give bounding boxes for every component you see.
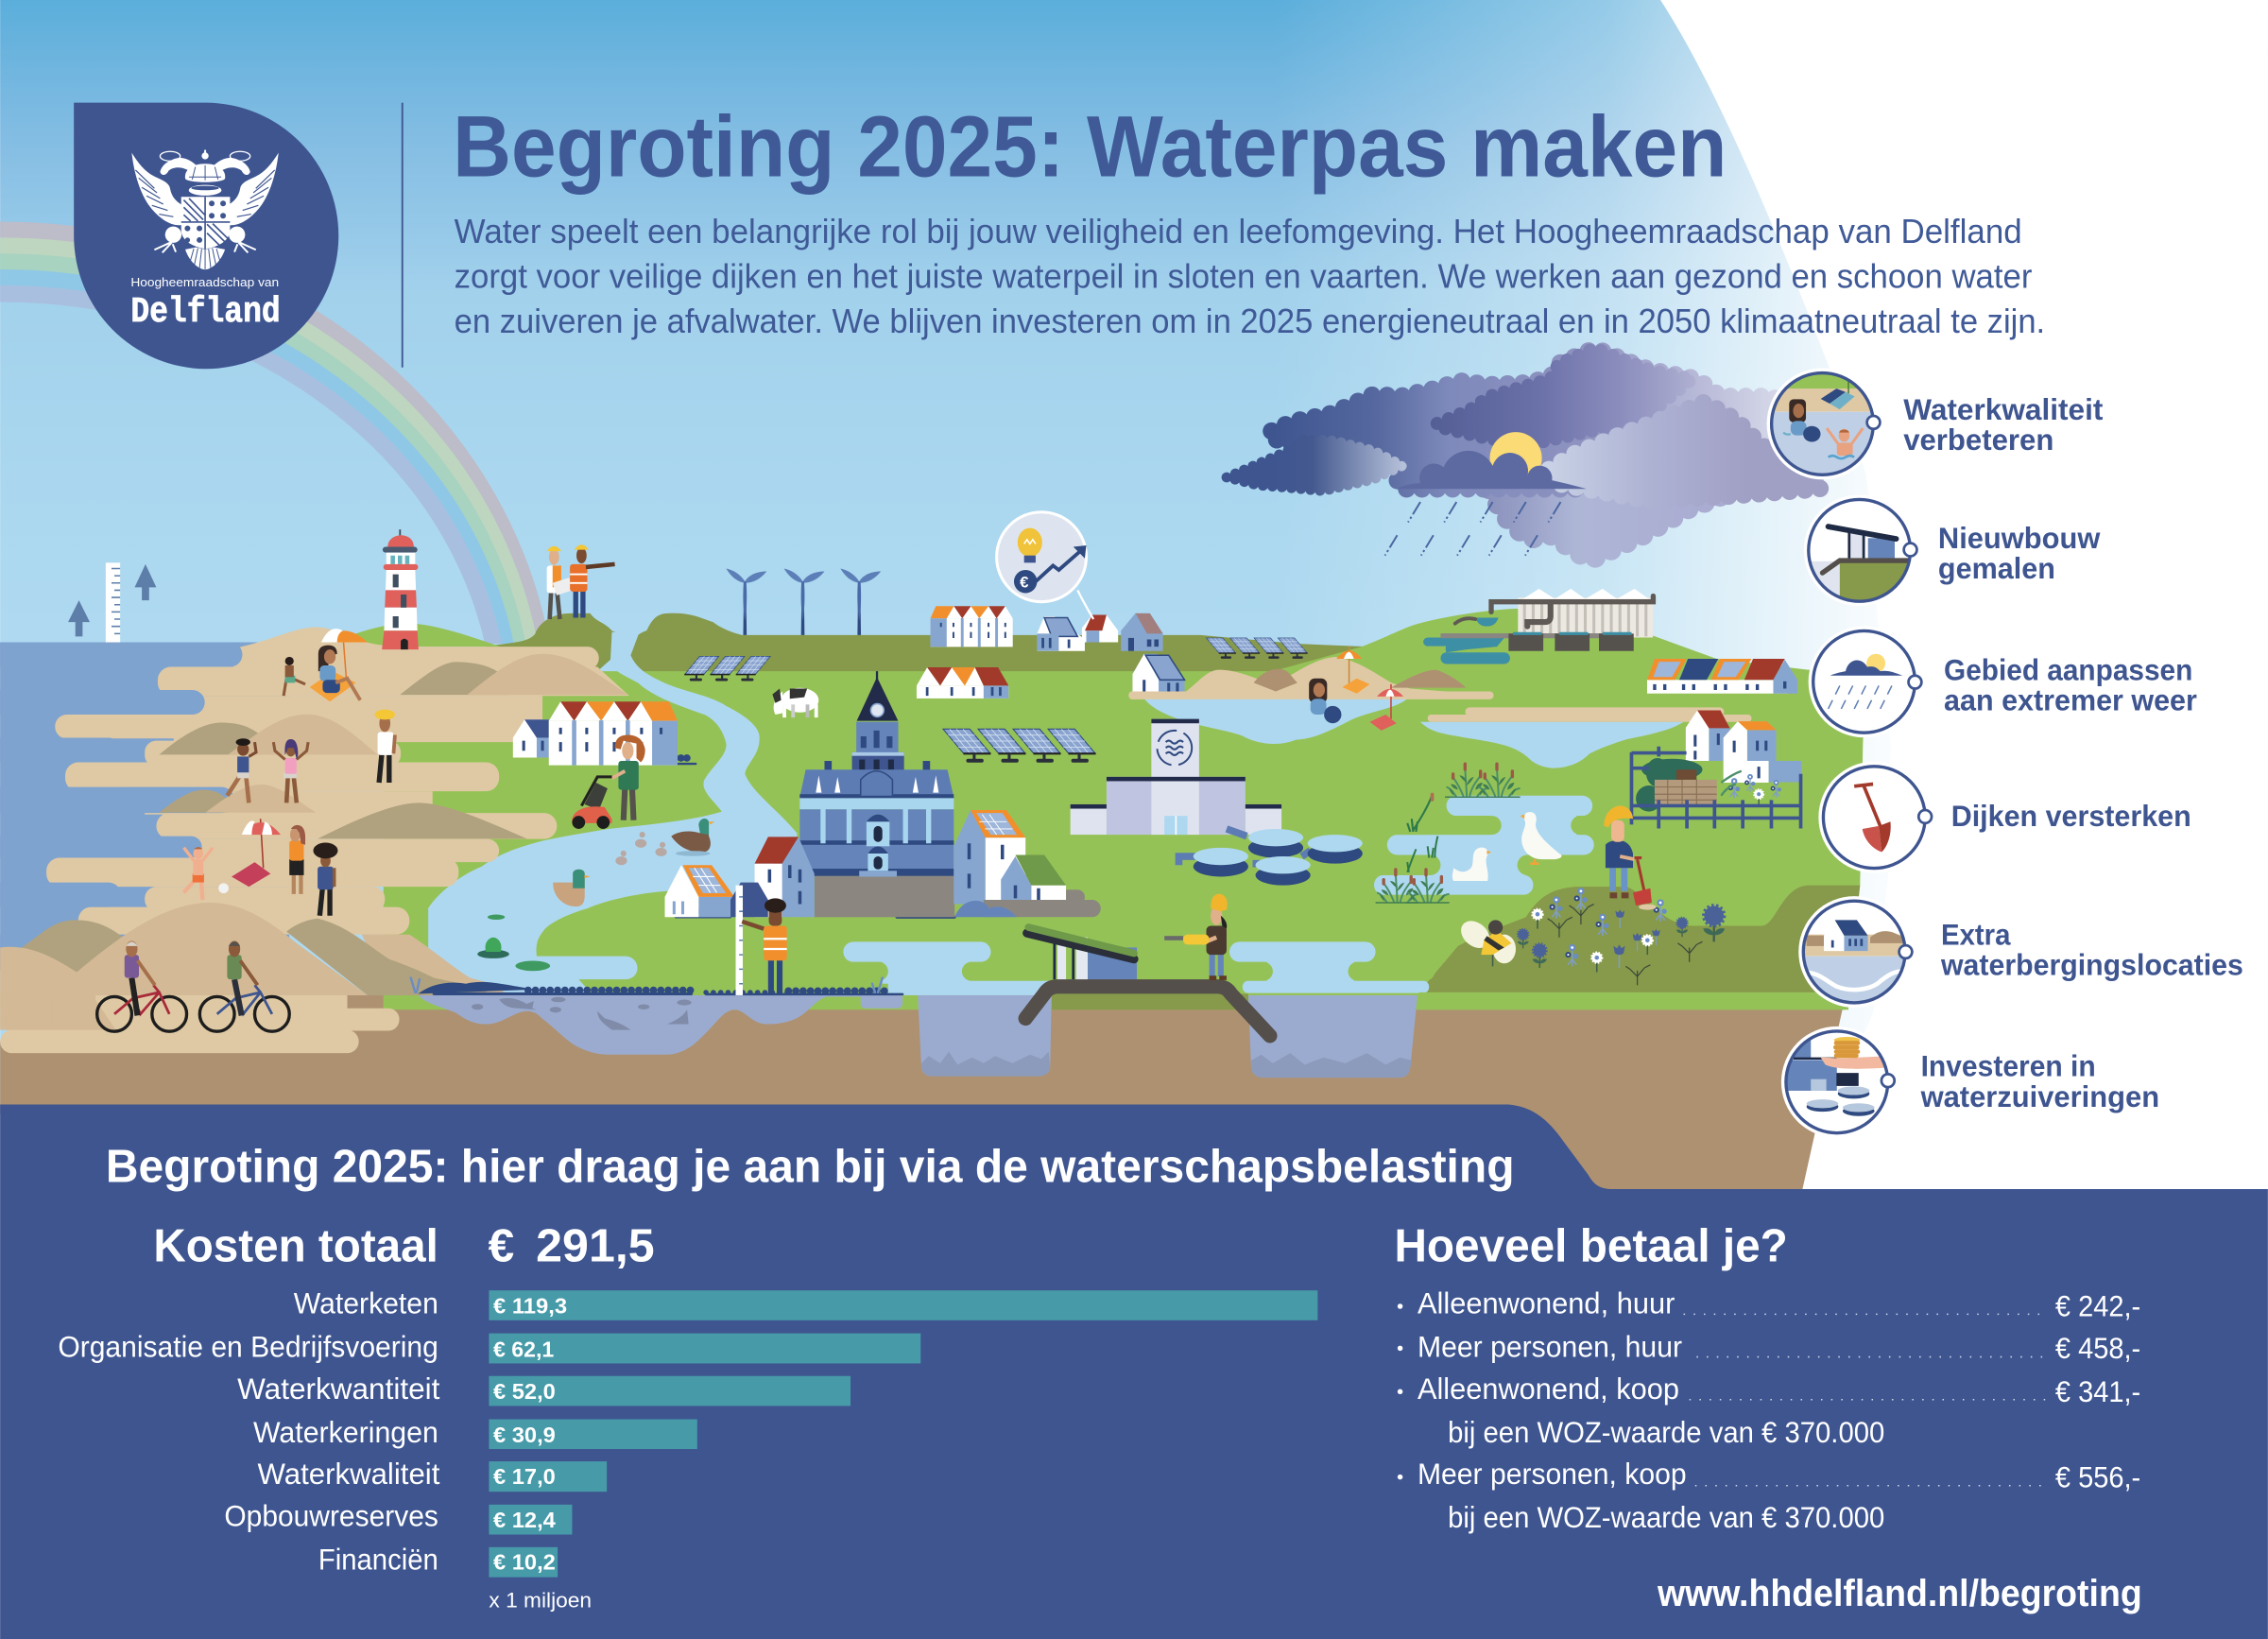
dancing child: [227, 738, 256, 802]
greenhouse and water works on the hill: [1423, 589, 1653, 664]
panel heading: Begroting 2025: hier draag je aan bij via de waterschapsbelasting: [106, 1141, 1515, 1192]
lighthouse: [382, 529, 419, 649]
bar labels: Financiën: [318, 1544, 438, 1577]
unit note: x 1 miljoen: [489, 1588, 592, 1612]
umbrella and sitting woman: [310, 629, 368, 701]
cyclist 1: [97, 941, 187, 1031]
dancing girl: [273, 739, 308, 802]
flowers on the hill: [1518, 888, 1725, 985]
gardener with spade: [1604, 805, 1656, 910]
bar values: € 12,4: [493, 1508, 556, 1532]
gauge and worker with vest: [736, 886, 787, 995]
divider line: [402, 103, 404, 368]
olive dike hill: [486, 613, 619, 671]
investment bubble: lightbulb and rising arrow: €: [1020, 573, 1029, 591]
garden: [1641, 759, 1702, 781]
houses: row by the dunes: [513, 701, 678, 766]
geese: [1452, 812, 1561, 881]
people: [97, 544, 1656, 1031]
bar values: € 119,3: [493, 1294, 567, 1319]
list: how much do you pay: [1394, 1221, 2140, 1534]
logo text: Hoogheemraadschap van: [130, 275, 279, 289]
running boy: [284, 657, 305, 696]
title: Begroting 2025: Waterpas maken: [453, 99, 1727, 196]
houses: top row: [931, 606, 1163, 651]
umbrella and towel: [218, 819, 281, 893]
pumping station with green roof: [1027, 927, 1137, 981]
list: how much do you pay: Alleenwonend, huur: [1418, 1287, 1675, 1320]
bar labels: Organisatie en Bedrijfsvoering: [58, 1331, 438, 1364]
intro paragraph: [455, 212, 2045, 340]
callout: reinforcing dikes: Dijken versterken: [1951, 800, 2191, 833]
bar values: € 52,0: [493, 1379, 556, 1404]
dunes: [0, 654, 627, 1030]
list: how much do you pay: € 458,-: [2055, 1332, 2140, 1365]
settling tanks: [1178, 829, 1363, 886]
row of terraced houses: [1647, 659, 1797, 694]
man in white shirt: [375, 710, 395, 783]
intro paragraph: en zuiveren je afvalwater. We blijven investeren om in 2025 energieneutraal en in 2050 klimaatneutraal te zijn.: [455, 302, 2045, 340]
bar labels: Waterkeringen: [253, 1416, 438, 1449]
bar values: € 30,9: [493, 1423, 556, 1447]
bee: [1455, 915, 1516, 966]
logo text: [130, 275, 281, 333]
right lower cloud: [1549, 402, 1824, 501]
callout: reinforcing dikes: [1818, 762, 2191, 873]
ducks and wildlife: [477, 819, 714, 971]
callouts on the right: [1767, 368, 2243, 1138]
fence: [1631, 747, 1801, 828]
list: how much do you pay: € 556,-: [2055, 1460, 2140, 1493]
man with afro: [313, 842, 337, 916]
cow: [772, 688, 818, 717]
reeds: [1376, 763, 1521, 903]
sky background: [0, 0, 2268, 1191]
callout: new pumping stations: gemalen: [1938, 552, 2055, 585]
green land: [384, 609, 1865, 1009]
rainbow: [0, 221, 544, 644]
solar panels: [684, 638, 1308, 763]
bar labels: Waterkwantiteit: [237, 1372, 440, 1406]
houses: second row: [917, 654, 1185, 699]
green lighthouse hill: [308, 624, 501, 647]
bar labels: Opbouwreserves: [224, 1500, 438, 1533]
houses with garden and fence: [1631, 710, 1801, 828]
inspectors on the dike: [547, 544, 615, 619]
bottom ponds: [843, 699, 1684, 995]
icon: coat of arms with eagle: [131, 150, 279, 269]
houses around town hall: [665, 810, 1101, 917]
list: how much do you pay: Meer personen, huur: [1418, 1331, 1682, 1364]
callout: adapting to extreme weather: [1809, 626, 2197, 737]
dark green back land: [615, 613, 1366, 680]
callout: adapting to extreme weather: Gebied aanpassen: [1944, 653, 2192, 686]
jumping man: [183, 847, 213, 900]
beach near ponds: [1128, 657, 1752, 722]
bar chart: total costs: [58, 1221, 1317, 1612]
sea inlets: [0, 643, 242, 971]
sea: [0, 643, 289, 968]
bar values: € 62,1: [493, 1337, 555, 1362]
list: how much do you pay: € 242,-: [2055, 1290, 2140, 1323]
list: how much do you pay: bij een WOZ-waarde van € 370.000: [1448, 1416, 1884, 1449]
cyclist 2: [199, 941, 289, 1031]
bar values: € 17,0: [493, 1464, 556, 1489]
underwater pond with fish: [418, 995, 902, 1055]
panel: budget: [0, 1104, 2268, 1639]
icon: water cycle: [1157, 731, 1192, 766]
chart heading: Kosten totaal: [153, 1221, 438, 1272]
chart heading: 291,5: [536, 1221, 655, 1272]
left lower cloud: [1227, 439, 1402, 491]
bar labels: Waterketen: [294, 1287, 438, 1320]
callout: investing in treatment: waterzuiveringen: [1920, 1080, 2159, 1113]
callout: new pumping stations: [1804, 494, 2101, 606]
callout: new pumping stations: Nieuwbouw: [1938, 522, 2101, 555]
town hall: [799, 671, 954, 917]
callout: extra water storage: [1798, 896, 2243, 1009]
bushes along the water: [411, 758, 954, 994]
callout: water quality: Waterkwaliteit: [1903, 393, 2104, 426]
chart heading: [153, 1221, 655, 1272]
website link: www.hhdelfland.nl/begroting: [1657, 1573, 2142, 1614]
callout: investing in treatment: Investeren in: [1921, 1050, 2096, 1083]
ground: brown soil: [0, 995, 1846, 1191]
woman in orange: [289, 825, 305, 894]
front dark cloud: [1396, 451, 1587, 489]
bar values: [493, 1294, 567, 1575]
intro paragraph: zorgt voor veilige dijken en het juiste waterpeil in sloten en vaarten. We werken aan gezond en schoon water: [455, 257, 2032, 296]
landscape: [0, 529, 1865, 1191]
storm cloud with sun and rain: [1227, 348, 1824, 561]
water level ruler with arrows: [68, 562, 156, 643]
callout: extra water storage: waterbergingslocaties: [1940, 949, 2243, 982]
upper dark layer: [1437, 348, 1692, 442]
investment bubble: lightbulb and rising arrow: [997, 512, 1093, 619]
callout: water quality: [1767, 368, 2104, 479]
lower back cloud: [1489, 463, 1721, 561]
wind turbines: [726, 568, 881, 635]
list: how much do you pay: Meer personen, koop: [1418, 1458, 1687, 1491]
logo: Delfland: [74, 103, 338, 369]
chart heading: €: [489, 1221, 514, 1272]
main cloud: [1271, 348, 1786, 489]
list: how much do you pay: Hoeveel betaal je?: [1394, 1221, 1788, 1272]
bar values: € 10,2: [493, 1550, 556, 1575]
logo text: Delfland: [130, 292, 281, 333]
person in pool and umbrellas: [1309, 647, 1403, 731]
river and lake: [428, 632, 799, 995]
rain: [1385, 502, 1560, 556]
person mowing: [572, 734, 645, 829]
bar labels: [58, 1287, 440, 1577]
bar labels: Waterkwaliteit: [258, 1458, 440, 1491]
sand strips: [0, 628, 629, 1053]
callout: adapting to extreme weather: aan extremer weer: [1944, 683, 2197, 716]
intro paragraph: Water speelt een belangrijke rol bij jouw veiligheid en leefomgeving. Het Hoogheemraadschap van Delfland: [455, 212, 2022, 250]
list: how much do you pay: bij een WOZ-waarde van € 370.000: [1448, 1501, 1884, 1534]
list: how much do you pay: Alleenwonend, koop: [1418, 1372, 1679, 1406]
sun: [1489, 432, 1542, 484]
water treatment plant: [1071, 719, 1281, 835]
callout: water quality: verbeteren: [1903, 423, 2053, 457]
olive flower hill: [1418, 886, 1860, 992]
green tongues between ponds: [810, 816, 1658, 981]
pipe under dike: [1025, 987, 1270, 1036]
callout: investing in treatment: [1781, 1027, 2159, 1138]
bars: [489, 1290, 1317, 1578]
list: how much do you pay: € 341,-: [2055, 1375, 2140, 1408]
worker with drill on roof pipe: [1164, 894, 1228, 978]
callout: extra water storage: Extra: [1941, 918, 2011, 951]
sluice wells: [918, 992, 1848, 1078]
